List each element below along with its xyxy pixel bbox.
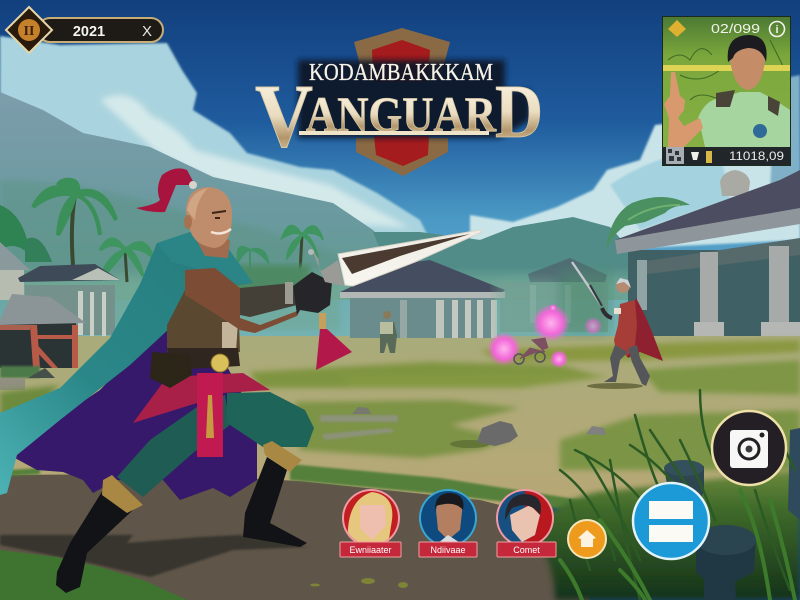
mountains (0, 92, 800, 345)
qr code (666, 147, 684, 164)
mist behind swordswoman (496, 270, 610, 338)
sword (572, 262, 602, 306)
portrait card (662, 16, 791, 166)
bushes left (0, 366, 55, 390)
grass bottom right (530, 470, 800, 600)
red hut (0, 294, 86, 368)
title backing (298, 60, 530, 138)
rear leg (117, 395, 230, 497)
buckle (211, 354, 229, 372)
glove (293, 272, 332, 315)
camera button (712, 411, 786, 485)
road shadow (0, 535, 307, 577)
title logo (255, 28, 543, 176)
cape (620, 298, 663, 361)
pouch (150, 352, 192, 388)
plume (136, 168, 195, 212)
avatar 2 (419, 488, 477, 557)
kodambakkkam word: KODAMBAKKKAM (309, 60, 493, 86)
field grass patches (0, 340, 800, 470)
avatar 3 (496, 488, 556, 557)
clouds left (0, 36, 430, 240)
year: 2021 (73, 24, 105, 40)
person (664, 35, 790, 147)
avatar 1 (340, 488, 402, 557)
middle palm trees (230, 226, 323, 295)
arm (185, 268, 300, 333)
torso armour (167, 290, 240, 352)
grass strip above road (10, 464, 620, 516)
vanguard word: ANGUAR (306, 86, 497, 142)
code number: 11018,09 (729, 149, 784, 163)
skirt red (133, 373, 270, 423)
home button (568, 520, 606, 558)
leaves on road (310, 578, 408, 588)
cape teal (0, 238, 253, 495)
road path (0, 474, 590, 600)
counter: 02/099 (711, 21, 760, 36)
right palm (606, 197, 690, 250)
legs (604, 345, 628, 382)
rear boot (56, 490, 133, 593)
bottom bar (663, 147, 790, 165)
clouds right (470, 75, 800, 250)
info icon: i (775, 24, 779, 36)
dome (720, 170, 750, 196)
head (184, 187, 232, 248)
map (663, 17, 790, 147)
head (616, 279, 630, 293)
ground field (0, 336, 800, 506)
neck (192, 232, 230, 258)
bar (38, 18, 163, 42)
rocks (352, 407, 606, 448)
front boot (243, 457, 307, 547)
diamond emblem (6, 7, 52, 53)
label 1: Ewniiaater (349, 545, 392, 555)
year badge: II (24, 24, 34, 39)
label 3: Comet (513, 545, 540, 555)
front leg (227, 392, 314, 447)
vanguard word (255, 65, 543, 166)
back temple (500, 258, 608, 332)
dark posts (664, 428, 800, 600)
white temple house (18, 264, 120, 336)
grass bottom left (0, 550, 187, 600)
center temple (340, 260, 505, 338)
sash red (197, 373, 223, 457)
hand (664, 72, 703, 147)
label 2: Ndiivaae (430, 545, 466, 555)
yellow diamond (668, 20, 686, 37)
cape purple lining (13, 300, 257, 500)
pink magic and fallen bike (487, 304, 602, 368)
far left house (0, 242, 30, 300)
vanguard word: D (495, 70, 543, 154)
swordswoman (572, 262, 663, 389)
columns (637, 260, 647, 310)
bracer (240, 283, 297, 317)
belt (167, 348, 240, 370)
background figure (380, 311, 397, 353)
left palm trees (0, 180, 153, 282)
small icon (691, 152, 699, 160)
yellow stripe (663, 65, 790, 71)
puddles (320, 415, 398, 440)
body (614, 300, 637, 356)
equals button (633, 483, 709, 559)
grass blades (560, 390, 795, 600)
close mark: X (142, 23, 152, 40)
tassel (316, 313, 352, 370)
year badge (6, 7, 163, 53)
hero (0, 168, 482, 593)
sword (308, 230, 482, 286)
vanguard word: V (255, 65, 313, 166)
sky background (0, 0, 800, 350)
shield emblem (354, 28, 450, 176)
info icon (770, 22, 784, 36)
scarf teal (157, 232, 253, 285)
far right building (615, 170, 800, 338)
